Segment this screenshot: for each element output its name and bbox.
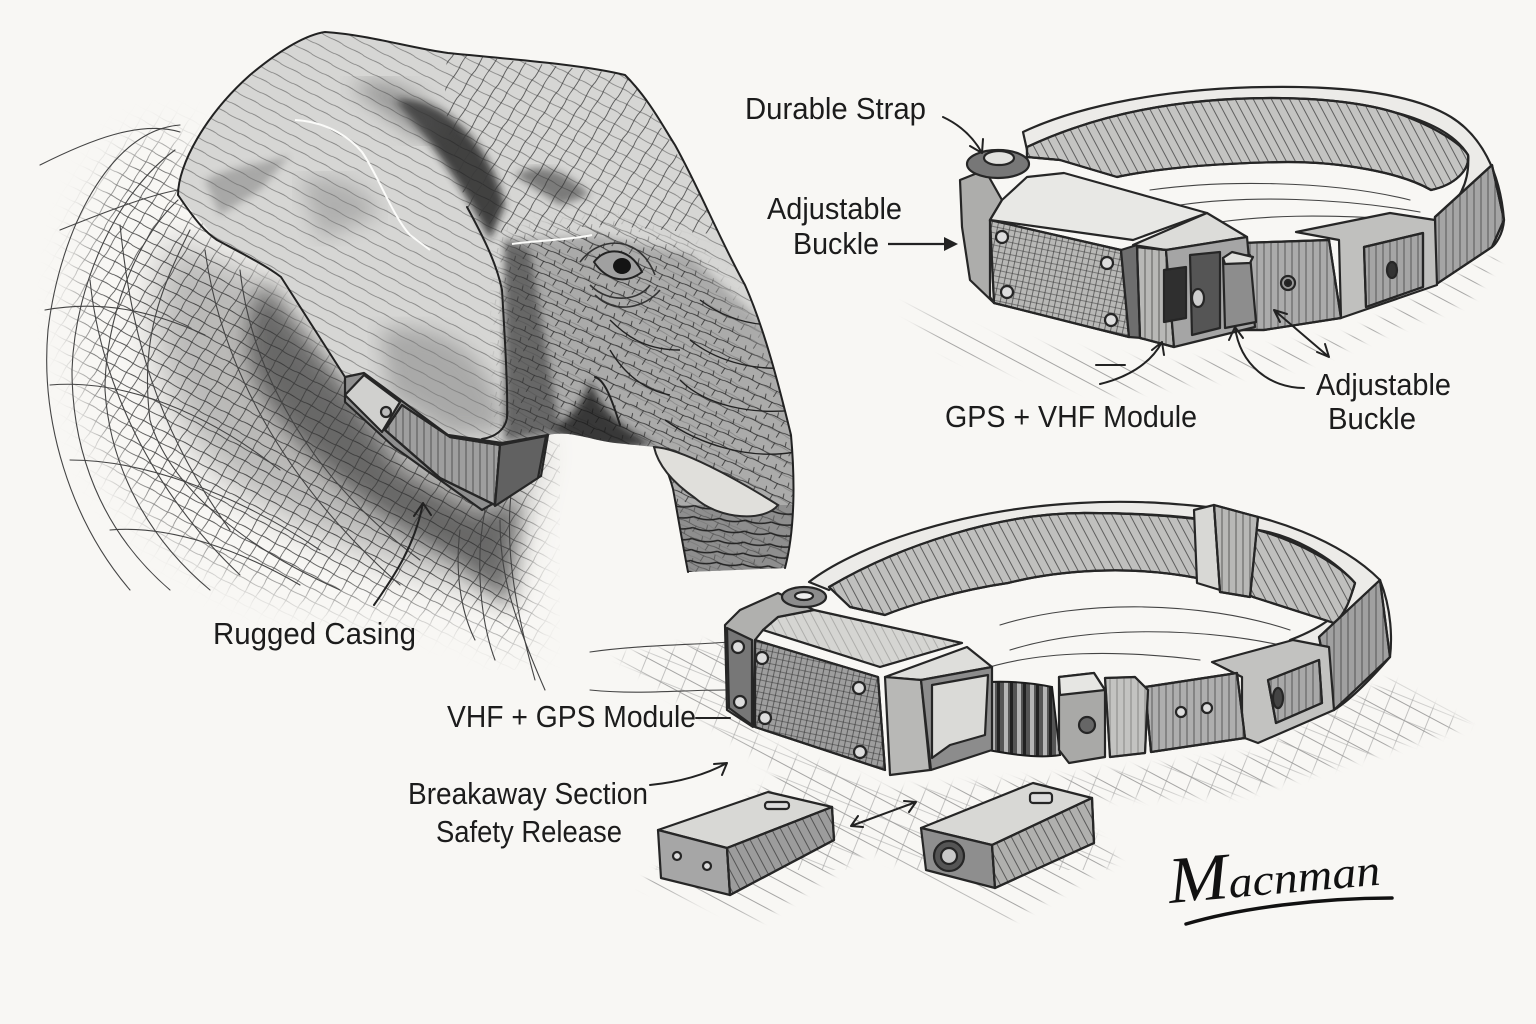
ear crease highlight [295,120,592,250]
strap section [1145,673,1245,752]
label: Adjustable right: Adjustable [1316,367,1451,402]
strap ring [1023,87,1504,285]
label: Buckle left: Buckle [793,226,879,261]
long floor lines [590,642,730,692]
label: Adjustable left: Adjustable [767,191,902,226]
strap ring [809,502,1391,710]
main module [725,587,992,775]
leader arrow: buckle right [1229,327,1304,388]
neck collar [345,373,548,510]
buckle [1164,237,1256,347]
tusk [654,447,778,516]
leader arrow: gps module [1096,342,1164,384]
double arrow between blocks [851,801,916,827]
double arrow [1274,310,1329,357]
inner floor strokes [1150,183,1420,222]
top collar illustration [888,87,1504,388]
inner floor strokes [980,607,1290,670]
label: Rugged Casing: Rugged Casing [213,616,416,651]
label: Breakaway Section: Breakaway Section [408,776,648,811]
label: Durable Strap: Durable Strap [745,91,926,126]
arrowhead: buckle [944,237,958,251]
leader arrow: strap [943,117,983,153]
leader arrow: breakaway [650,763,727,785]
leader arrow: rugged casing [374,503,431,605]
label: GPS + VHF Module: GPS + VHF Module [945,399,1197,434]
floor shading [614,254,1502,924]
label: VHF + GPS Module: VHF + GPS Module [447,699,696,734]
ear and head outlines [178,32,793,572]
leader arrow: buckle [888,243,950,245]
head and ear tone [170,25,810,590]
loop with window [1296,213,1437,318]
main module [960,170,1247,347]
elephant illustration [30,25,810,690]
label: Safety Release: Safety Release [436,814,622,849]
buckle blocks [1059,673,1148,763]
label: Buckle right: Buckle [1328,401,1416,436]
strap piece [1240,240,1341,330]
signature: Macnman [1164,827,1383,918]
leader line: module [696,717,730,719]
right breakaway block [921,783,1094,888]
vertical loops [1194,505,1258,597]
bellows [950,682,1060,756]
body hatching [30,100,560,690]
side loop [1212,640,1334,743]
left breakaway block [658,792,834,895]
elephant eye [580,243,660,307]
bottom collar illustration [590,502,1391,895]
top button [967,150,1029,178]
